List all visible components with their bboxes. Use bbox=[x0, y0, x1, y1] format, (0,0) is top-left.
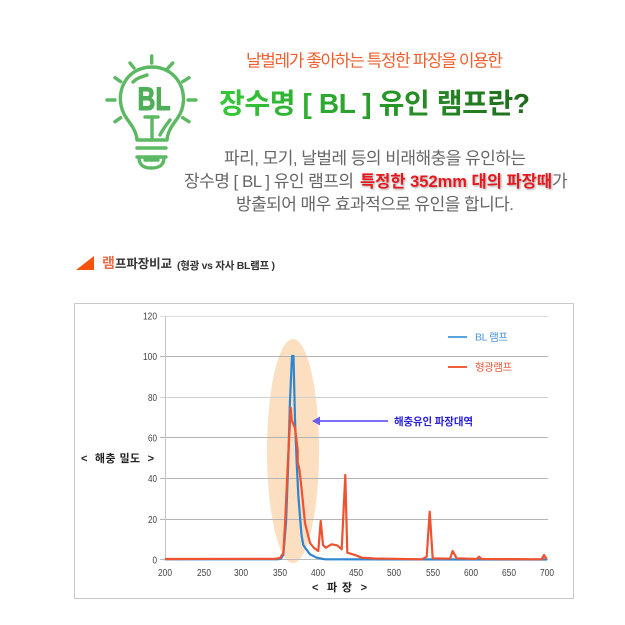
icon: orange triangle bbox=[76, 256, 94, 270]
subtitle: 날벌레가 좋아하는 특정한 파장을 이용한 bbox=[246, 52, 503, 70]
y axis labels: 80 bbox=[148, 393, 157, 404]
y axis labels bbox=[143, 312, 157, 566]
x axis labels: 350 bbox=[273, 568, 287, 579]
main heading: 장수명 [ BL ] 유인 램프란? bbox=[219, 88, 530, 119]
arrow: attractant wavelength band bbox=[312, 416, 388, 426]
x axis labels: 700 bbox=[540, 568, 554, 579]
y axis labels: 0 bbox=[152, 556, 157, 566]
x axis labels: 200 bbox=[158, 568, 172, 579]
x axis labels: 650 bbox=[502, 568, 516, 579]
y axis title: < 해충 밀도 > bbox=[81, 452, 154, 465]
callout: attractant wavelength band: 해충유인 파장대역 bbox=[394, 415, 473, 428]
description text: 파리, 모기, 날벌레 등의 비래해충을 유인하는 bbox=[224, 149, 526, 168]
y axis labels: 40 bbox=[148, 474, 157, 485]
description text: 장수명 [ BL ] 유인 램프의 bbox=[184, 172, 354, 191]
x axis labels: 400 bbox=[311, 568, 325, 579]
x axis labels: 300 bbox=[234, 568, 248, 579]
x axis labels: 250 bbox=[197, 568, 211, 579]
line: BL lamp bbox=[165, 356, 547, 560]
x axis labels: 550 bbox=[426, 568, 440, 579]
x axis labels: 450 bbox=[349, 568, 363, 579]
legend: BL lamp: BL 램프 bbox=[475, 332, 508, 344]
chart grid and axes bbox=[160, 316, 548, 560]
y axis labels: 100 bbox=[143, 352, 157, 363]
x axis labels bbox=[158, 568, 554, 579]
y axis labels: 60 bbox=[148, 434, 157, 444]
description text: 가 bbox=[552, 172, 568, 191]
x axis labels: 600 bbox=[464, 568, 478, 579]
line: fluorescent lamp bbox=[165, 408, 547, 559]
bulb letters: BL bbox=[138, 81, 170, 117]
description text: 방출되어 매우 효과적으로 유인을 합니다. bbox=[236, 195, 514, 214]
section heading: lamp wavelength comparison: 프파장비교 bbox=[115, 257, 172, 271]
section heading: lamp wavelength comparison: (형광 vs 자사 BL램프 ) bbox=[177, 259, 275, 272]
panel: chart frame bbox=[74, 304, 574, 598]
y axis labels: 120 bbox=[143, 312, 157, 322]
legend: fluorescent lamp: 형광램프 bbox=[475, 362, 512, 374]
legend: fluorescent lamp bbox=[448, 362, 512, 374]
x axis title: < 파 장 > bbox=[312, 581, 367, 594]
highlight: attractant wavelength ellipse bbox=[267, 339, 319, 563]
section heading: lamp wavelength comparison bbox=[76, 255, 275, 272]
description text bbox=[184, 149, 568, 214]
x axis labels: 500 bbox=[387, 568, 401, 579]
highlighted wavelength text: 특정한 352mm 대의 파장때 bbox=[360, 172, 552, 191]
icon: BL light bulb bbox=[107, 56, 196, 168]
y axis labels: 20 bbox=[148, 515, 157, 526]
section heading: lamp wavelength comparison: 램 bbox=[102, 255, 115, 271]
legend: BL lamp bbox=[448, 332, 508, 344]
